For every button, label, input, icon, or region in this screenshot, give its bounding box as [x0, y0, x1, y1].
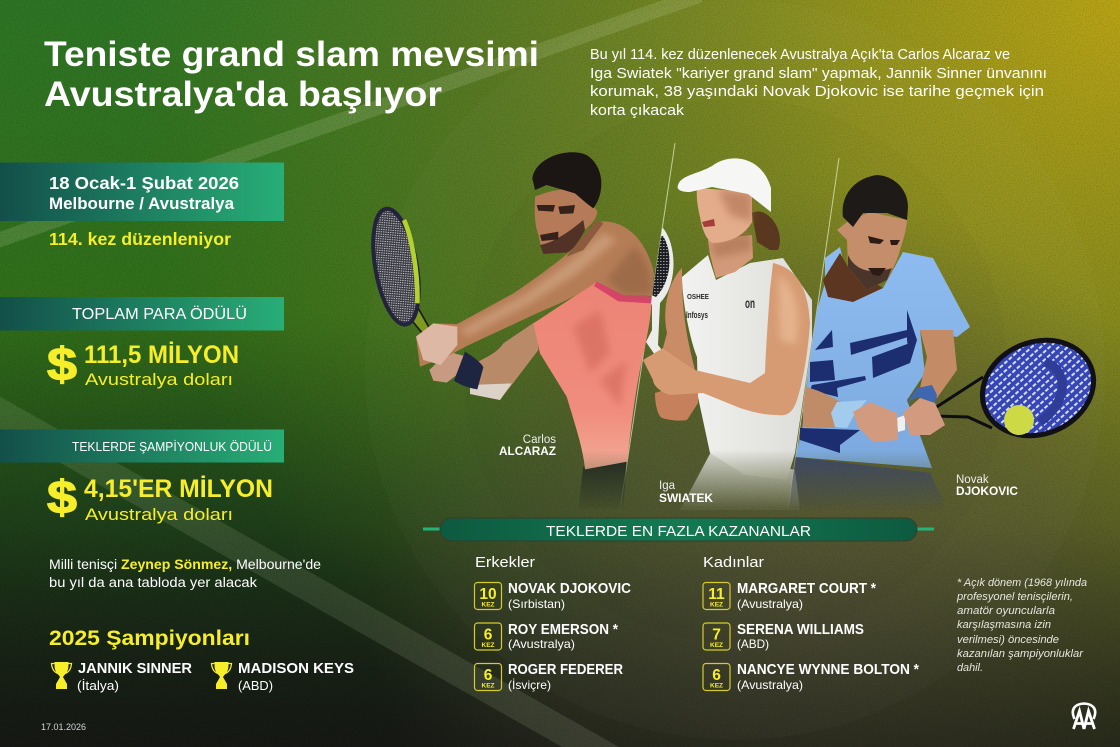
divider line: left player: [620, 143, 675, 510]
right arm: [643, 263, 810, 415]
singles champion prize value: $: [47, 471, 77, 523]
row: Nancye Wynne Bolton: [703, 662, 919, 692]
row: Nancye Wynne Bolton: NANCYE WYNNE BOLTON *: [737, 662, 919, 678]
icon: trophy: [212, 662, 232, 689]
lower fist: [655, 391, 698, 421]
tennis ball: [1004, 405, 1034, 435]
singles champion prize value: 4,15'ER MİLYON: [84, 475, 273, 503]
torso and front arm: [416, 222, 654, 367]
player photo: Carlos Alcaraz: [365, 152, 654, 508]
footnote: kazanılan şampiyonluklar: [957, 648, 1084, 660]
row: Margaret Court: KEZ: [710, 602, 723, 608]
row: Serena Williams: (ABD): [737, 637, 769, 651]
footnote: * Açık dönem (1968 yılında: [957, 577, 1087, 589]
label: Novak Djokovic: [956, 474, 1018, 498]
row: Novak Djokovic: NOVAK DJOKOVIC: [508, 581, 631, 597]
heading: most singles winners: TEKLERDE EN FAZLA KAZANANLAR: [546, 523, 811, 540]
label: Carlos Alcaraz: ALCARAZ: [499, 446, 556, 458]
racket grip: [897, 415, 905, 432]
total prize value: [47, 338, 239, 390]
intro paragraph: [590, 47, 1047, 119]
intro paragraph: Iga Swiatek "kariyer grand slam" yapmak, Jannik Sinner ünvanını: [590, 66, 1047, 82]
panel: total prize heading: TOPLAM PARA ÖDÜLÜ: [72, 305, 247, 323]
heading: 2025 champions: 2025 Şampiyonları: [49, 627, 250, 650]
row: Roger Federer: 6: [484, 667, 493, 684]
label: Iga Swiatek: [659, 480, 714, 505]
row: Novak Djokovic: [474, 581, 631, 611]
row: Serena Williams: SERENA WILLIAMS: [737, 622, 864, 638]
panel: men list: Erkekler: [475, 554, 535, 571]
row: Roy Emerson: (Avustralya): [508, 637, 575, 651]
title: [44, 35, 539, 114]
footnote: karşılaşmasına izin: [957, 619, 1051, 631]
intro paragraph: korumak, 38 yaşındaki Novak Djokovic ise tarihe geçmek için: [590, 84, 1044, 100]
Zeynep Sonmez note: Milli tenisçi Zeynep Sönmez, Melbourne'de: [49, 557, 321, 572]
panel: singles champion prize heading: [0, 430, 284, 462]
racket: [646, 228, 674, 354]
row: Roy Emerson: 6: [484, 626, 493, 644]
neck: [567, 220, 603, 257]
title: Teniste grand slam mevsimi: [44, 35, 539, 74]
row: Nancye Wynne Bolton: KEZ: [710, 682, 723, 690]
hair: [532, 152, 601, 208]
footnote: dahil.: [957, 662, 983, 674]
champion: Jannik Sinner: [52, 660, 192, 693]
shirt navy pattern: [800, 310, 917, 453]
Zeynep Sonmez note: bu yıl da ana tabloda yer alacak: [49, 575, 257, 590]
icon: AA logo: [1073, 704, 1095, 729]
total prize value: Avustralya doları: [85, 370, 233, 389]
panel: dates and location: [0, 162, 284, 221]
title: Avustralya'da başlıyor: [44, 75, 442, 114]
singles champion prize value: Avustralya doları: [85, 505, 233, 524]
footnote: [956, 577, 1087, 674]
panel: total prize heading: [0, 297, 284, 330]
tank top: [682, 255, 812, 480]
rear arm: [470, 323, 538, 400]
panel: men list: [474, 554, 631, 692]
divider line: right player: [788, 158, 839, 510]
Zeynep Sonmez note: [49, 557, 321, 590]
row: Serena Williams: KEZ: [710, 642, 723, 649]
intro paragraph: Bu yıl 114. kez düzenlenecek Avustralya Açık'ta Carlos Alcaraz ve: [590, 47, 1010, 63]
cap: [678, 158, 771, 212]
row: Roger Federer: ROGER FEDERER: [508, 662, 623, 678]
row: Roy Emerson: KEZ: [482, 642, 495, 649]
champion: Jannik Sinner: (İtalya): [77, 679, 119, 693]
label: Novak Djokovic: DJOKOVIC: [956, 486, 1018, 498]
face: [837, 212, 907, 290]
champion: Jannik Sinner: JANNIK SINNER: [78, 660, 192, 677]
champion: Madison Keys: MADISON KEYS: [238, 660, 354, 677]
player photo: Novak Djokovic: [785, 175, 1108, 510]
row: Serena Williams: [703, 622, 864, 651]
panel: dates and location: 18 Ocak-1 Şubat 2026: [49, 173, 239, 193]
label: Novak Djokovic: Novak: [956, 474, 989, 486]
intro paragraph: korta çıkacak: [590, 103, 685, 119]
face: [697, 188, 752, 243]
total prize value: $: [47, 338, 77, 390]
champion: Madison Keys: [212, 660, 354, 693]
row: Roy Emerson: [474, 622, 618, 651]
racket: [936, 338, 1096, 438]
row: Margaret Court: [703, 581, 876, 611]
skirt: [680, 450, 800, 510]
sponsor logos: OSHEE: [687, 292, 709, 301]
row: Roger Federer: KEZ: [482, 682, 495, 690]
footnote: amatör oyuncularla: [957, 605, 1055, 617]
heading: most singles winners: [423, 518, 934, 541]
right wristband: [907, 385, 937, 403]
icon: trophy: [52, 662, 72, 689]
head: [535, 189, 597, 254]
row: Novak Djokovic: 10: [479, 586, 497, 603]
left wristband: [831, 400, 867, 428]
hair: [843, 175, 908, 227]
left forearm: [803, 388, 842, 428]
row: Serena Williams: 7: [712, 626, 721, 644]
sponsor logos: Infosys: [686, 310, 708, 320]
row: Novak Djokovic: KEZ: [482, 602, 495, 608]
total prize value: 111,5 MİLYON: [84, 341, 239, 369]
singles champion prize value: [47, 471, 273, 524]
row: Margaret Court: MARGARET COURT *: [737, 581, 876, 597]
right arm: [920, 330, 957, 398]
hair: [752, 212, 780, 250]
neck: [823, 253, 883, 302]
wristband: [454, 352, 483, 389]
footnote: profesyonel tenisçilerin,: [956, 591, 1073, 603]
row: Margaret Court: 11: [708, 586, 725, 603]
panel: singles champion prize heading: TEKLERDE ŞAMPİYONLUK ÖDÜLÜ: [72, 439, 272, 454]
row: Novak Djokovic: (Sırbistan): [508, 597, 565, 611]
row: Nancye Wynne Bolton: 6: [712, 667, 721, 684]
label: Carlos Alcaraz: [499, 434, 556, 458]
label: Iga Swiatek: Iga: [659, 480, 676, 492]
date: 17.01.2026: [41, 722, 86, 732]
shirt: [533, 282, 652, 469]
row: Roger Federer: [474, 662, 623, 692]
left arm: [663, 268, 695, 370]
racket: [365, 205, 433, 339]
panel: women list: Kadınlar: [703, 554, 764, 571]
panel: dates and location: Melbourne / Avustralya: [49, 195, 235, 213]
sponsor logos: [686, 292, 755, 320]
pants: [578, 460, 627, 508]
sponsor logos: on: [745, 295, 755, 311]
footnote: verilmesi) öncesinde: [957, 634, 1059, 646]
shorts: [789, 457, 943, 504]
rear hand: [429, 353, 467, 383]
hands: [853, 398, 945, 442]
shirt: [795, 247, 970, 468]
label: Carlos Alcaraz: Carlos: [523, 434, 556, 446]
front hand: [416, 323, 457, 365]
panel: women list: [703, 554, 919, 692]
neck: [708, 235, 753, 278]
player photo: Iga Swiatek: [640, 158, 812, 510]
row: Nancye Wynne Bolton: (Avustralya): [737, 678, 803, 692]
label: Iga Swiatek: SWIATEK: [659, 493, 714, 505]
edition note: 114. kez düzenleniyor: [49, 229, 231, 249]
row: Margaret Court: (Avustralya): [737, 597, 803, 611]
row: Roy Emerson: ROY EMERSON *: [508, 622, 618, 638]
champion: Madison Keys: (ABD): [238, 679, 273, 693]
row: Roger Federer: (İsviçre): [508, 678, 551, 692]
